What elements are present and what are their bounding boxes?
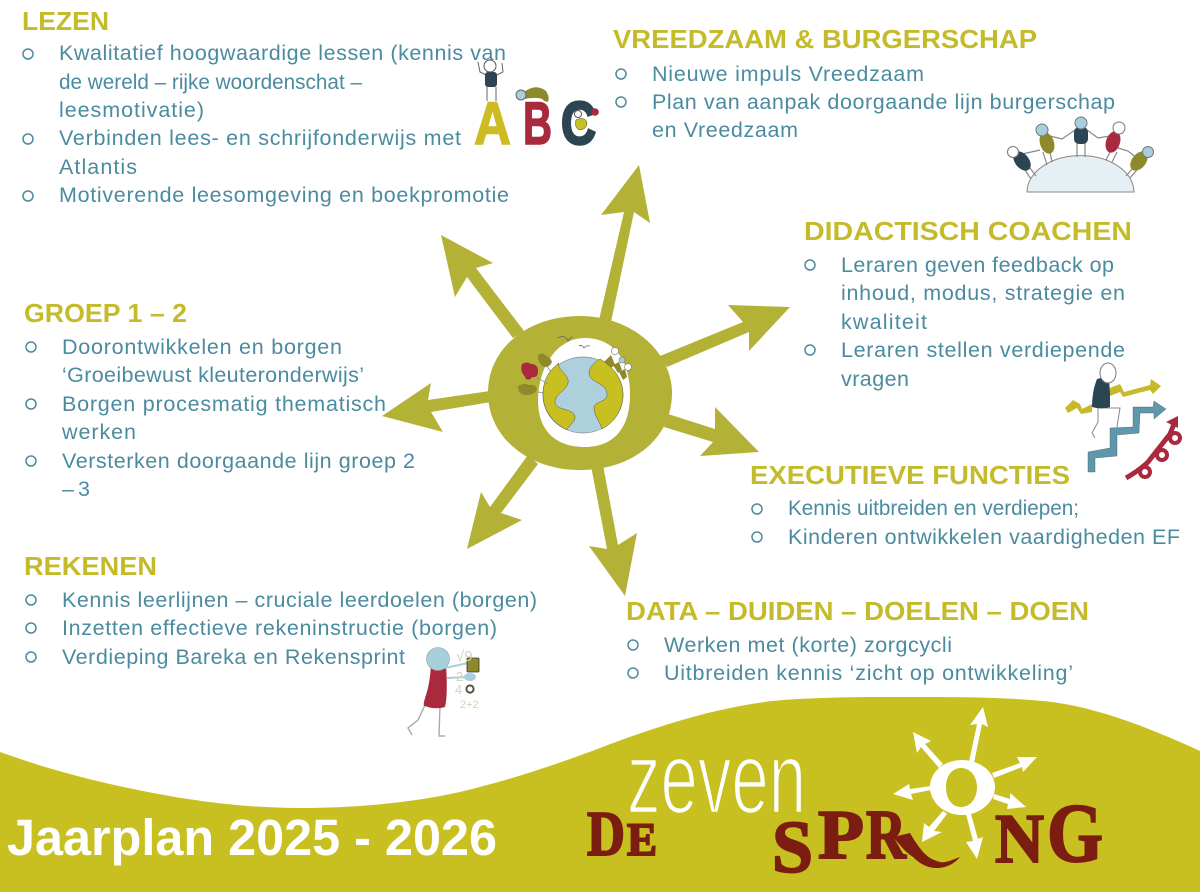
heading: data duiden doelen doen: DATA – DUIDEN – DOELEN – DOEN	[626, 596, 1089, 626]
list: data duiden doelen doen: Werken met (korte) zorgcycli	[664, 633, 952, 657]
list: groep 1-2: Doorontwikkelen en borgen	[62, 335, 342, 359]
heading: didactisch coachen: DIDACTISCH COACHEN	[804, 216, 1132, 246]
list: groep 1-2: werken	[61, 420, 136, 444]
list: groep 1-2: – 3	[62, 477, 90, 501]
panel: didactisch coachen	[804, 216, 1180, 478]
list: lezen: Motiverende leesomgeving en boekpromotie	[59, 183, 509, 207]
logo: de zeven sprong	[587, 707, 1103, 889]
list: groep 1-2	[26, 335, 415, 501]
panel: rekenen	[24, 551, 537, 736]
list: didactisch coachen: kwaliteit	[841, 310, 927, 334]
icon: ABC letters with figures: A	[474, 90, 511, 157]
logo word: zeven: zeven	[627, 721, 806, 835]
heading: vreedzaam: VREEDZAAM & BURGERSCHAP	[613, 24, 1037, 54]
heading: rekenen: REKENEN	[24, 551, 157, 581]
heading: lezen: LEZEN	[22, 6, 109, 36]
list: rekenen	[26, 588, 537, 669]
icon: figure running with growth arrows	[1065, 363, 1180, 478]
bottom wave band	[0, 697, 1200, 892]
list: data duiden doelen doen: Uitbreiden kennis ‘zicht op ontwikkeling’	[664, 661, 1073, 685]
icon: ABC letters with figures: C	[561, 90, 596, 157]
list: vreedzaam	[616, 62, 1115, 142]
list: rekenen: Verdieping Bareka en Rekensprint	[62, 645, 405, 669]
list: lezen: Kwalitatief hoogwaardige lessen (kennis van	[59, 41, 506, 65]
icon: figure doing sums: 4	[455, 682, 462, 697]
list: vreedzaam: en Vreedzaam	[652, 118, 798, 142]
logo word: spr	[772, 797, 960, 889]
list: didactisch coachen: Leraren geven feedback op	[841, 253, 1114, 277]
central O with seven arrows	[382, 165, 790, 596]
list: vreedzaam: Plan van aanpak doorgaande lijn burgerschap	[652, 90, 1115, 114]
list: didactisch coachen	[805, 253, 1125, 391]
panel: vreedzaam en burgerschap	[613, 24, 1154, 192]
list: lezen: Verbinden lees- en schrijfonderwijs met	[59, 126, 461, 150]
list: lezen: de wereld – rijke woordenschat –	[59, 70, 362, 94]
list: groep 1-2: Versterken doorgaande lijn groep 2	[62, 449, 415, 473]
ring	[488, 316, 672, 470]
figures on globe	[518, 347, 631, 395]
logo word: de	[587, 798, 657, 869]
panel: groep 1-2	[24, 298, 415, 501]
globe	[543, 336, 623, 433]
list: groep 1-2: ‘Groeibewust kleuteronderwijs’	[62, 363, 364, 387]
panel: executieve functies	[750, 460, 1180, 549]
logo word: ng: G	[1047, 787, 1103, 880]
list: groep 1-2: Borgen procesmatig thematisch	[62, 392, 386, 416]
list: lezen: Atlantis	[59, 155, 137, 179]
icon: figure doing sums: 2+2	[460, 699, 479, 711]
list: didactisch coachen: Leraren stellen verdiepende	[841, 338, 1125, 362]
icon: figure doing sums	[408, 648, 479, 736]
list: executieve functies: Kinderen ontwikkelen vaardigheden EF	[788, 525, 1180, 549]
logo word: de: E	[627, 814, 657, 866]
icon: figure doing sums: √9	[456, 648, 473, 665]
icon: figures holding hands on a globe	[1008, 117, 1154, 192]
logo word: de: D	[587, 798, 625, 869]
panel: data duiden doelen doen	[626, 596, 1089, 685]
logo word: spr: R	[866, 797, 907, 874]
list: executieve functies: Kennis uitbreiden en verdiepen;	[788, 496, 1079, 520]
icon: ABC letters with figures: B	[523, 90, 552, 157]
logo word: spr: S	[772, 807, 813, 889]
list: didactisch coachen: inhoud, modus, strategie en	[841, 281, 1125, 305]
arrows	[382, 165, 790, 596]
icon: ABC letters with figures	[474, 60, 599, 157]
heading: groep 1-2: GROEP 1 – 2	[24, 298, 187, 328]
logo mark: O with arrows	[893, 707, 1037, 859]
list: lezen: leesmotivatie)	[59, 98, 204, 122]
icon: figure doing sums: 2	[456, 669, 463, 684]
list: rekenen: Inzetten effectieve rekeninstructie (borgen)	[62, 616, 497, 640]
list: data duiden doelen doen	[628, 633, 1073, 685]
logo word: ng: N	[995, 801, 1044, 878]
logo word: ng	[995, 787, 1103, 880]
list: didactisch coachen: vragen	[841, 367, 909, 391]
list: executieve functies	[752, 496, 1180, 549]
panel: lezen	[22, 6, 599, 207]
heading: executieve functies: EXECUTIEVE FUNCTIES	[750, 460, 1070, 490]
list: lezen	[23, 41, 509, 207]
list: rekenen: Kennis leerlijnen – cruciale leerdoelen (borgen)	[62, 588, 537, 612]
title: jaarplan: Jaarplan 2025 - 2026	[7, 809, 497, 866]
logo word: spr: P	[818, 797, 864, 874]
list: vreedzaam: Nieuwe impuls Vreedzaam	[652, 62, 924, 86]
